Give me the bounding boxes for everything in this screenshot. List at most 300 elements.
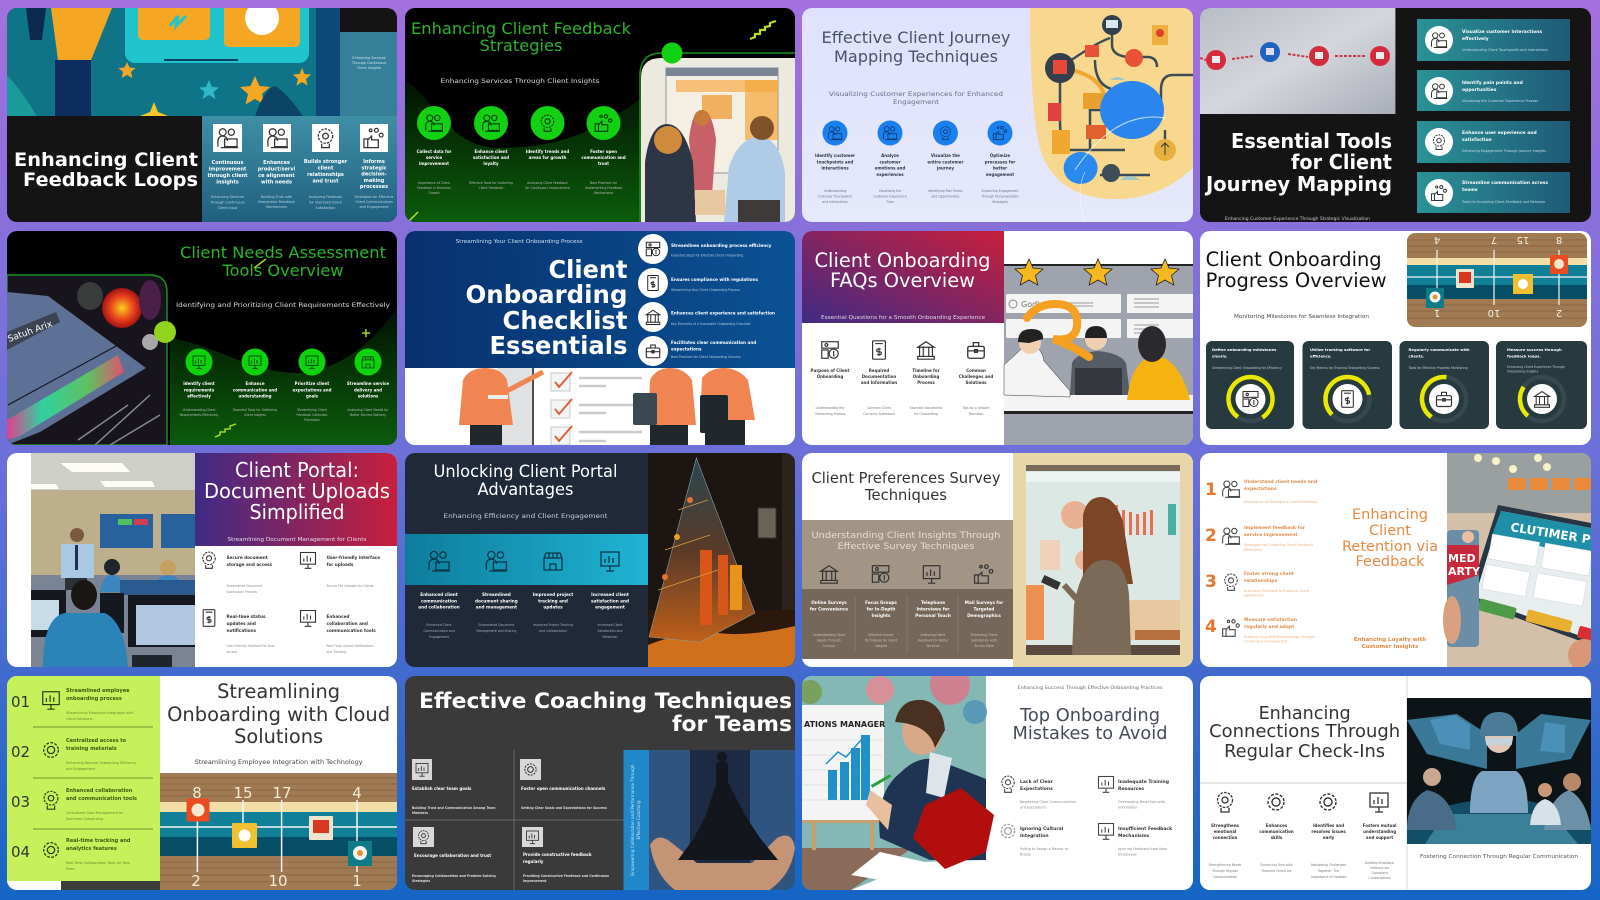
advantage labels: engagement — [595, 605, 625, 610]
milestone text: Utilize tracking software for — [1310, 347, 1370, 352]
timeline image: 15 — [233, 784, 253, 802]
checklist text: Ensures compliance with regulations — [671, 277, 759, 282]
supporting notes: Effective Tools for Gathering — [469, 181, 513, 185]
agenda numbers: 04 — [11, 843, 30, 861]
supporting notes: Growth — [428, 191, 440, 195]
icons — [821, 565, 993, 583]
title: Techniques — [864, 487, 947, 504]
milestone text: Key Metrics for Tracking Onboarding Success — [1310, 366, 1380, 370]
agenda numbers: 03 — [11, 793, 30, 811]
technique labels: Analyze — [881, 153, 899, 158]
benefit labels: Fosters mutual — [1363, 823, 1397, 828]
strategy labels — [417, 149, 626, 166]
step text: relationships — [1244, 578, 1277, 584]
benefit labels: Enhances — [263, 160, 290, 166]
assessment labels: goals — [306, 394, 319, 399]
slide: Effective Client Journey Mapping Techniques — [802, 8, 1193, 222]
supporting notes: and Collaboration — [539, 629, 567, 633]
assessment labels: solutions — [358, 394, 379, 399]
supporting notes: Feedback for Better — [918, 638, 949, 642]
supporting notes: Common Client — [867, 406, 892, 410]
supporting notes: Insights — [875, 644, 887, 648]
feature text: Secure document — [226, 555, 268, 560]
supporting notes: Consistent — [1371, 871, 1389, 875]
feature text: Access — [226, 650, 237, 654]
icons — [203, 552, 316, 626]
agenda text: onboarding process — [66, 696, 122, 702]
feature text: communication tools — [326, 628, 376, 633]
subtitle: Streamlining Document Management for Clients — [228, 537, 367, 543]
checklist text: expectations — [671, 346, 702, 352]
photo: journey pins — [1200, 8, 1395, 114]
agenda text: and Engagement — [66, 767, 96, 771]
supporting notes: Understanding Client — [813, 633, 846, 637]
method labels: Demographics — [967, 613, 1001, 618]
supporting notes: Understanding Client — [183, 408, 216, 412]
method labels: Telephone — [921, 600, 945, 605]
agenda text: Centralized Data Management for — [66, 811, 124, 815]
supporting notes — [423, 623, 623, 639]
taupe band — [802, 520, 1013, 589]
mistake text: Expectations — [1020, 786, 1053, 792]
title: Streamlining — [217, 680, 340, 703]
benefit labels: making — [364, 178, 385, 184]
checklist text: Best Practices for Client Onboarding Success — [671, 355, 741, 359]
benefit labels — [207, 159, 388, 190]
benefit labels: insights — [216, 180, 239, 186]
assessment labels: understanding — [238, 394, 272, 399]
step text: Foster strong client — [1244, 571, 1295, 577]
step text: Measure satisfaction — [1244, 617, 1297, 623]
benefit labels: ce alignment — [258, 173, 295, 179]
benefit labels: emotional — [1214, 829, 1237, 834]
title: Enhancing — [1259, 703, 1351, 724]
photo: team at whiteboard — [640, 53, 802, 230]
benefit labels: Strengthens — [1211, 823, 1240, 828]
FAQ labels: Purpose of Client — [811, 368, 850, 373]
FAQ labels: Process — [917, 380, 935, 385]
timeline image: 4 — [1434, 234, 1440, 245]
agenda text: Streamlining Employee Integration with — [66, 711, 133, 715]
icons — [1218, 792, 1388, 812]
supporting notes: Surveys — [823, 644, 836, 648]
title: Tools Overview — [221, 261, 344, 280]
technique text: Building Trust and Communication Among Team — [412, 806, 495, 810]
title: Strategies — [480, 36, 562, 55]
title: Client Preferences Survey — [812, 470, 1001, 487]
technique text: Encouraging Collaboration and Problem-Solving — [412, 874, 496, 878]
feature text: Real-time status — [226, 614, 266, 619]
supporting notes — [418, 182, 622, 194]
title: Advantages — [478, 479, 574, 499]
agenda numbers: 02 — [11, 743, 30, 761]
supporting notes: Transition — [968, 412, 984, 416]
title: Regular Check-Ins — [1224, 741, 1385, 762]
title: Essential Tools — [1231, 129, 1392, 153]
tool card text: Enhancing Engagement Through Journey Insights — [1462, 149, 1546, 153]
slide: Streamlining Onboarding with Cloud Solutions — [7, 676, 397, 890]
supporting notes: Through Regular — [1211, 869, 1239, 873]
supporting notes: Analyzing Client Needs for — [348, 408, 389, 412]
mistake text — [1020, 779, 1173, 856]
supporting notes: Client Feedback — [479, 186, 504, 190]
benefit labels: skills — [1271, 835, 1283, 840]
photo: futuristic meeting — [1407, 698, 1591, 844]
strategy labels: areas for growth — [529, 155, 567, 160]
supporting notes: Conversations — [1369, 876, 1391, 880]
benefit labels: processes — [360, 184, 388, 190]
strategy labels: service — [426, 155, 442, 160]
timeline image: 8 — [192, 784, 202, 802]
feature text: notifications — [226, 628, 257, 633]
green icon circles — [186, 348, 382, 376]
strategy labels: communication and — [581, 155, 626, 160]
title: Client — [548, 255, 628, 284]
agenda text — [66, 688, 137, 871]
supporting notes: Visualizing the — [879, 189, 901, 193]
method labels: for In-Depth — [867, 606, 895, 612]
technique labels: journey — [936, 166, 954, 171]
technique text: Providing Constructive Feedback and Continuous — [523, 874, 609, 878]
tool card text: satisfaction — [1462, 137, 1492, 143]
title: Effective Coaching Techniques — [419, 689, 792, 713]
tool card text: Identify pain points and — [1462, 80, 1523, 86]
step numbers — [1205, 480, 1217, 637]
agenda numbers: 01 — [11, 693, 30, 711]
method labels: Interviews for — [916, 606, 950, 612]
blue icon circles — [822, 120, 1012, 146]
assessment labels: requirements — [184, 387, 215, 392]
supporting notes: Through Continuous — [209, 200, 245, 204]
photo: training room — [31, 453, 195, 667]
assessment labels: Identify client — [183, 381, 215, 386]
supporting notes: Implementing Feedback — [585, 186, 622, 190]
timeline image — [160, 773, 397, 890]
photo: woman viewing data wall — [1013, 453, 1193, 667]
step text — [1244, 479, 1318, 644]
strategy labels: Collect data for — [417, 149, 451, 154]
subtitle: Essential Questions for a Smooth Onboarding Experience — [821, 315, 985, 321]
supporting notes: Communication and — [423, 629, 455, 633]
photo: analytics tablet on desk — [7, 275, 167, 445]
tagline: Customer Insights — [1362, 644, 1419, 650]
title: Simplified — [250, 500, 344, 524]
mistake text: Resources — [1118, 786, 1144, 792]
kicker: Enhancing Success Through Effective Onboarding Practices — [1018, 685, 1163, 691]
icon circles — [638, 234, 668, 366]
timeline image: 4 — [352, 784, 362, 802]
agenda text: analytics features — [66, 846, 117, 852]
mistake text: Insufficient Feedback — [1118, 826, 1173, 832]
title: Client Onboarding — [1206, 248, 1382, 271]
title: Client Onboarding — [814, 249, 990, 272]
feature text: Secure File Uploads for Clients — [326, 584, 374, 588]
technique text: Establish clear team goals — [412, 786, 472, 791]
supporting notes: Client Input — [218, 206, 238, 210]
supporting notes — [813, 633, 998, 648]
milestone text: Enhancing Client Experience Through — [1507, 365, 1565, 369]
side caption: Through Continuous — [351, 61, 386, 65]
checklist text: Streamlines onboarding process efficiency — [671, 243, 772, 248]
blue vertical strip: Empowering Collaboration and Performance Through — [630, 764, 635, 876]
supporting notes: Effective Survey — [868, 633, 894, 637]
title: Journey Mapping — [1204, 172, 1392, 196]
advantage labels: Enhanced client — [420, 592, 458, 597]
accent marks — [215, 259, 370, 437]
technique labels — [815, 153, 1015, 177]
technique labels: entire customer — [927, 159, 963, 164]
supporting notes: Building Emotional — [1365, 861, 1394, 865]
FAQ labels: Challenges and — [959, 374, 993, 379]
supporting notes: Responsive Feedback — [258, 200, 295, 204]
method labels: Insights — [872, 613, 891, 618]
feature text: Enhanced — [326, 614, 349, 619]
step numbers: 2 — [1205, 526, 1217, 546]
step text: Implement feedback for — [1244, 525, 1306, 531]
timeline image: 7 — [1491, 234, 1497, 245]
icons — [822, 341, 984, 359]
supporting notes: Understanding the — [816, 406, 845, 410]
accent squiggle — [750, 21, 776, 39]
step numbers: 4 — [1205, 617, 1217, 637]
mistake text: Mechanisms — [1118, 833, 1150, 839]
icons — [1001, 776, 1114, 839]
step text: Continuous Improvement — [1244, 640, 1288, 644]
benefit labels: product/servi — [258, 166, 296, 172]
timeline image: 1 — [352, 872, 362, 890]
slide: Enhancing Client Feedback Strategies — [405, 8, 802, 230]
technique labels: Identify customer — [815, 153, 855, 158]
supporting notes: Identifying Pain Points — [928, 189, 963, 193]
technique labels: processes for — [985, 159, 1015, 164]
strategy labels: Identify trends and — [526, 149, 569, 154]
mistake text: Inadequate Training — [1118, 779, 1169, 785]
subtitle: Enhancing Services Through Client Insights — [440, 77, 600, 85]
illustration: journey map — [1030, 8, 1193, 199]
benefit labels: early — [1323, 835, 1335, 840]
feature text: Real-Time Upload Notifications — [326, 644, 374, 648]
agenda text: Centralized access to — [66, 738, 127, 744]
mistake text: Neglecting Clear Communication — [1020, 800, 1076, 804]
red hexagon — [913, 788, 994, 869]
supporting notes: Improved Project Tracking — [533, 623, 573, 627]
supporting notes: and Engagement — [359, 205, 389, 209]
timeline image: 17 — [272, 784, 292, 802]
supporting notes: Needs Through — [817, 638, 841, 642]
photo: operations manager at chart: ATIONS MANAGER — [804, 720, 885, 729]
supporting notes: Analyzing Feedback — [309, 195, 342, 199]
timeline image: 15 — [1517, 234, 1529, 245]
supporting notes: Satisfaction — [316, 206, 335, 210]
benefit labels: understanding — [1363, 829, 1396, 834]
technique labels: Visualize the — [931, 153, 960, 158]
supporting notes: Importance of Updates — [1311, 875, 1347, 879]
advantage labels: and collaboration — [418, 605, 460, 610]
benefit labels: communication — [1259, 829, 1294, 834]
title: Enhancing Client Feedback — [411, 19, 632, 38]
supporting notes: Onboarding Process — [815, 412, 846, 416]
technique text: Setting Clear Goals and Expectations for Success — [521, 806, 607, 810]
technique labels: engagement — [986, 172, 1014, 177]
timeline image: 1 — [1434, 307, 1440, 318]
title: Checklist — [502, 306, 628, 335]
supporting notes: Strategies — [992, 200, 1008, 204]
method labels: for Convenience — [810, 606, 848, 612]
supporting notes: Customer Touchpoints — [818, 194, 853, 198]
mistake text: Information — [1118, 806, 1138, 810]
FAQ labels: Timeline for — [912, 368, 940, 373]
supporting notes: Streamlined Document — [479, 623, 515, 627]
feature text — [226, 555, 380, 654]
title: Document Uploads — [204, 479, 390, 503]
supporting notes: Feedback in Business — [417, 186, 451, 190]
mistake text: Ignoring Feedback from New — [1118, 847, 1167, 851]
supporting notes: for Onboarding — [914, 412, 938, 416]
icon tiles — [412, 759, 543, 847]
benefit labels — [1211, 823, 1397, 840]
subtitle: Understanding Client Insights Through — [812, 531, 1000, 541]
step text: Building Long-Term Relationships Through — [1244, 635, 1315, 639]
timeline image: 2 — [1556, 307, 1562, 318]
mistake text: Integration — [1020, 833, 1049, 839]
tool card text: effectively — [1462, 36, 1489, 42]
slide: Enhancing Client Retention via Feedback — [1200, 453, 1600, 671]
advantage labels: satisfaction and — [591, 598, 629, 603]
agenda text: Real-time tracking and — [66, 838, 131, 844]
supporting notes: Analyzing Client — [920, 633, 946, 637]
supporting notes: Enhancing Client — [971, 633, 998, 637]
supporting notes: Survey Data — [974, 644, 994, 648]
side caption: Client Insights — [357, 66, 381, 70]
title: Mistakes to Avoid — [1012, 724, 1168, 744]
slide: Client Onboarding Progress Overview — [1200, 231, 1591, 445]
supporting notes — [818, 189, 1019, 204]
supporting notes: Best Practices for — [590, 181, 618, 185]
tool card text — [1461, 29, 1548, 204]
step text: Strategies for Collecting Client Feedback — [1244, 543, 1313, 547]
illustration: team with checklist — [459, 368, 755, 445]
FAQ labels: Documentation — [862, 374, 896, 379]
mistake text: Ignoring Cultural — [1020, 826, 1064, 832]
method labels: Personal Touch — [915, 613, 951, 618]
agenda text: and communication tools — [66, 796, 137, 802]
assessment labels: communication and — [233, 387, 277, 392]
assessment labels: Streamline service — [347, 381, 389, 386]
supporting notes: Client Insights — [244, 413, 266, 417]
timeline image: 8 — [1556, 234, 1562, 245]
step text: Satisfaction — [1244, 594, 1264, 598]
checklist text: Key Elements of a Successful Onboarding Checklist — [671, 322, 751, 326]
milestone text — [1212, 347, 1565, 374]
illustration: help desk meeting: Godlarch — [1021, 300, 1057, 309]
subtitle: Identifying and Prioritizing Client Requirements Effectively — [176, 302, 390, 309]
technique labels: interactions — [821, 166, 849, 171]
supporting notes: Enhancing Trust with — [1260, 863, 1293, 867]
method labels — [810, 600, 1004, 618]
feature text: storage and access — [226, 562, 272, 567]
technique text: Improvement — [523, 879, 547, 883]
mistake text: of Expectations — [1020, 806, 1046, 810]
step text: Analyzing Feedback to Enhance Client — [1244, 589, 1309, 593]
checklist text — [671, 243, 775, 359]
supporting notes: and Interactions — [822, 200, 848, 204]
benefit labels: improvement — [209, 166, 247, 172]
supporting notes — [1209, 861, 1394, 880]
supporting notes: Services — [926, 644, 940, 648]
supporting notes: Importance of Client — [418, 181, 451, 185]
title: Client Portal: — [235, 458, 359, 482]
mistake text: Buddy — [1020, 852, 1031, 856]
benefit labels: Informs — [363, 159, 385, 165]
slide: Enhancing Connections Through Regular Check-Ins — [1200, 676, 1591, 890]
method labels: Online Surveys — [811, 600, 847, 605]
slide: Effective Coaching Techniques for Teams — [405, 676, 795, 898]
checklist text: Facilitates clear communication and — [671, 340, 756, 345]
photo: client portal on tablet — [1443, 453, 1600, 671]
blue vertical strip: Effective Coaching — [636, 800, 641, 840]
strategy labels: loyalty — [483, 161, 499, 166]
benefit labels: Builds stronger — [304, 159, 348, 165]
step text: Effectively — [1244, 548, 1262, 552]
mistake text: Failing to Assign a Mentor or — [1020, 847, 1069, 851]
assessment labels: expectations and — [293, 387, 332, 392]
title: Onboarding — [466, 280, 628, 309]
technique labels: better — [993, 166, 1007, 171]
footer subtitle: Enhancing Customer Experience Through Strategic Visualization — [1225, 216, 1371, 221]
agenda numbers — [11, 693, 30, 861]
supporting notes: Concerns Addressed — [863, 412, 895, 416]
technique labels: emotions and — [875, 166, 905, 171]
mistake text: Overloading New Hires with — [1118, 800, 1165, 804]
photo caption: Fostering Connection Through Regular Communication — [1420, 854, 1578, 860]
strategy labels: trust — [598, 161, 609, 166]
milestone text: Define onboarding milestones — [1212, 347, 1277, 352]
milestone text: Measure success through — [1507, 347, 1562, 352]
title: Top Onboarding — [1019, 706, 1160, 726]
benefit labels: client — [318, 166, 334, 172]
supporting notes: and Opportunities — [931, 194, 960, 198]
step numbers: 1 — [1205, 480, 1217, 500]
supporting notes: Better Service Delivery — [350, 413, 386, 417]
supporting notes: Satisfaction and — [598, 629, 623, 633]
assessment labels: effectively — [187, 394, 211, 399]
benefit labels: connection — [1213, 835, 1238, 840]
title: Client Needs Assessment — [180, 243, 386, 262]
supporting notes — [815, 406, 990, 416]
supporting notes: Strategies for Effective — [355, 195, 393, 199]
FAQ labels: Onboarding — [817, 374, 843, 379]
supporting notes: Enhancing Engagement — [982, 189, 1019, 193]
milestone text: Streamlining Client Onboarding for Efficiency — [1212, 366, 1282, 370]
teal icon band — [405, 534, 648, 585]
strategy labels: Enhance client — [474, 149, 508, 154]
milestone text: Onboarding Insights — [1507, 370, 1539, 374]
milestone text: clients. — [1408, 353, 1425, 358]
assessment labels: Enhance — [245, 381, 265, 386]
slide: Unlocking Client Portal Advantages — [405, 453, 795, 667]
agenda text: Enhanced collaboration — [66, 788, 133, 794]
supporting notes: Intimacy via — [1370, 866, 1389, 870]
blue glass orbs — [1064, 81, 1165, 222]
feature text: User-Friendly Interface for Easy — [226, 644, 275, 648]
agenda text: Cloud Solutions — [66, 717, 93, 721]
icons — [1223, 481, 1240, 636]
assessment labels — [183, 381, 389, 399]
benefit labels: Identifies and — [1313, 823, 1344, 828]
subtitle: Engagement — [893, 98, 939, 106]
supporting notes: Essential Tools for Gathering — [233, 408, 277, 412]
title: Onboarding with Cloud — [167, 703, 390, 726]
